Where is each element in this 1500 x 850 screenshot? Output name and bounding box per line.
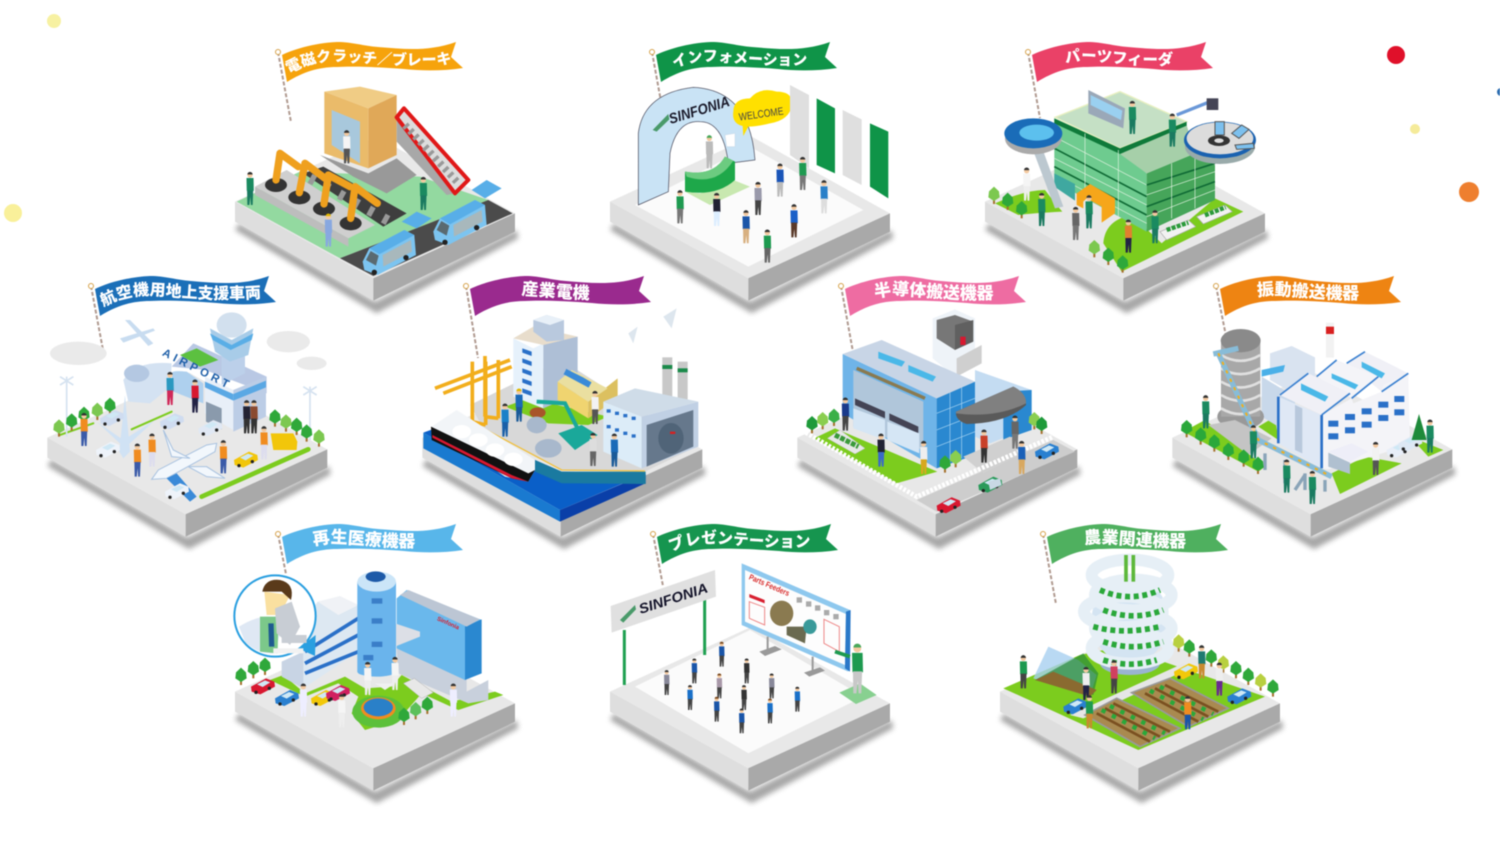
banner posts bbox=[624, 598, 705, 685]
road bbox=[917, 440, 1075, 512]
white floor bbox=[635, 147, 863, 267]
runway green strips bbox=[60, 412, 308, 497]
scene: airport bbox=[47, 312, 331, 549]
excavator bbox=[530, 402, 598, 450]
flag: semiconductor transfer equipment bbox=[837, 275, 1026, 350]
flag: aircraft ground support vehicles: 航空機用地上支援車両 bbox=[99, 280, 261, 308]
left feeder disc bbox=[1004, 118, 1063, 208]
scene: agriculture bbox=[1000, 555, 1283, 803]
main factory bbox=[1278, 352, 1410, 469]
spiral plant tower bbox=[1084, 555, 1172, 675]
decorative dot: pale yellow left bbox=[4, 204, 22, 222]
platform bbox=[47, 373, 331, 549]
round tower bbox=[357, 571, 396, 677]
vehicles bbox=[1063, 663, 1251, 714]
trees bbox=[53, 398, 325, 447]
scene: information reception bbox=[610, 85, 893, 313]
decorative dot: blue bbox=[1497, 88, 1500, 96]
scene: vibratory conveying factory bbox=[1172, 323, 1456, 549]
main airplane bbox=[152, 430, 225, 479]
scrap piles bbox=[527, 417, 562, 458]
ship bbox=[431, 410, 535, 482]
small annex bbox=[1328, 443, 1368, 474]
green floor bbox=[237, 172, 488, 258]
vans bbox=[1387, 435, 1422, 458]
flag: presentation: プレゼンテーション bbox=[668, 528, 810, 552]
welcome bubble: WELCOME bbox=[738, 105, 784, 124]
quay land bbox=[470, 360, 697, 472]
flag: agricultural equipment: 農業関連機器 bbox=[1084, 528, 1186, 550]
flag: regenerative medicine equipment: 再生医療機器 bbox=[312, 528, 416, 550]
sky plane bbox=[120, 320, 155, 346]
green paths and lawn bbox=[270, 675, 503, 730]
farm plots bbox=[1085, 678, 1228, 747]
screen feet bbox=[759, 637, 825, 677]
raised conveyor stand bbox=[255, 167, 407, 247]
welcome bubble bbox=[733, 90, 792, 136]
flag: parts feeder bbox=[1024, 41, 1214, 119]
flag: parts feeder: パーツフィーダ bbox=[1065, 47, 1174, 67]
quay face bbox=[535, 460, 646, 484]
conveyor line bbox=[1213, 348, 1332, 492]
workers bbox=[501, 389, 618, 467]
platform bbox=[610, 627, 893, 803]
canopy bbox=[956, 387, 1026, 424]
decorative dot: pale yellow top left bbox=[47, 14, 61, 28]
scene: parts feeder building bbox=[985, 90, 1268, 313]
building bbox=[1054, 92, 1215, 232]
steps under elevator bbox=[320, 155, 417, 193]
flag: electromagnetic clutch / brake: 電磁クラッチ／ブレーキ bbox=[284, 48, 451, 73]
workers bbox=[246, 172, 427, 247]
greenhouse bbox=[1033, 647, 1098, 697]
right hospital wing: Sinfonia bbox=[436, 616, 460, 632]
lawn bbox=[1183, 417, 1443, 494]
quay yellow line bbox=[483, 428, 645, 471]
reception desk and receptionist bbox=[685, 133, 750, 205]
farm road bbox=[1070, 663, 1193, 718]
trees bbox=[235, 658, 433, 725]
yellow factory bbox=[558, 370, 618, 418]
flag: information: インフォメーション bbox=[672, 49, 808, 68]
fountain bbox=[352, 696, 404, 728]
vehicles bbox=[937, 443, 1059, 513]
wind poles bbox=[60, 377, 317, 440]
scene: presentation bbox=[610, 563, 893, 803]
trees bbox=[1173, 634, 1279, 697]
entrance steps bbox=[963, 437, 1030, 473]
flag: semiconductor transfer equipment: 半導体搬送機器 bbox=[874, 280, 994, 302]
workers bbox=[1202, 395, 1434, 504]
platform bbox=[235, 137, 518, 313]
spiral tower bbox=[1217, 329, 1264, 429]
flag: vibratory conveying equipment bbox=[1212, 275, 1402, 334]
decorative dot: pale yellow right bbox=[1410, 124, 1420, 134]
arch logo bbox=[653, 94, 732, 132]
buses bbox=[363, 180, 502, 275]
decorative dot: orange bbox=[1459, 182, 1479, 202]
trees bbox=[1181, 414, 1427, 474]
arch logo: SINFONIA bbox=[667, 94, 732, 128]
scene: industrial machinery at port bbox=[422, 308, 706, 549]
platform bbox=[985, 137, 1268, 313]
main building bbox=[843, 340, 975, 468]
decorative dot: red bbox=[1387, 46, 1405, 64]
right hospital wing bbox=[397, 590, 488, 703]
trees and planter bbox=[806, 409, 1047, 473]
audience bbox=[664, 642, 800, 733]
rear wing bbox=[975, 370, 1032, 443]
orange entrance bbox=[1077, 184, 1115, 223]
lawns bbox=[995, 190, 1243, 272]
flag: aircraft ground support vehicles bbox=[87, 275, 276, 348]
road bbox=[340, 200, 513, 276]
staff and passengers bbox=[80, 372, 268, 477]
rubble base bbox=[1208, 420, 1272, 455]
lawn bbox=[814, 428, 937, 483]
right feeder disc and robot arm bbox=[1177, 98, 1256, 164]
hanging banners bbox=[790, 85, 888, 198]
scene: semiconductor building bbox=[797, 309, 1081, 549]
planters bbox=[1160, 205, 1232, 240]
people bbox=[1023, 101, 1176, 253]
water bbox=[423, 428, 646, 522]
presenter on podium bbox=[835, 644, 877, 704]
terminal and control tower bbox=[123, 312, 267, 432]
flag: vibratory conveying equipment: 振動搬送機器 bbox=[1256, 280, 1360, 302]
crane bbox=[435, 356, 512, 425]
escalator bbox=[397, 108, 468, 195]
flag: regenerative medicine equipment bbox=[274, 523, 464, 574]
vertical plane bbox=[97, 395, 155, 458]
upper tower and box bbox=[933, 309, 982, 377]
airport sign: AIRPORT bbox=[160, 347, 234, 392]
flag: industrial electric machinery: 産業電機 bbox=[521, 280, 590, 302]
grass bbox=[505, 398, 608, 425]
ground vehicles bbox=[96, 410, 297, 502]
platform bbox=[422, 373, 706, 549]
scene: regenerative medicine hospital bbox=[234, 571, 518, 803]
flag: agricultural equipment bbox=[1039, 523, 1228, 604]
power station and turbine bbox=[603, 357, 698, 468]
white floor bbox=[635, 630, 863, 753]
platform bbox=[797, 373, 1081, 549]
office tower bbox=[513, 315, 578, 408]
seagulls bbox=[628, 308, 677, 343]
trees bbox=[988, 187, 1128, 273]
elevator tower bbox=[324, 87, 397, 168]
screen: Parts Feeders bbox=[748, 573, 791, 598]
flag: electromagnetic clutch / brake bbox=[274, 41, 464, 122]
scene: factory, elevator, escalator and buses bbox=[235, 87, 518, 313]
platform bbox=[1000, 627, 1283, 803]
robot arms bbox=[265, 153, 377, 230]
platform bbox=[235, 627, 518, 803]
SINFONIA banner bbox=[611, 570, 716, 633]
visitors bbox=[676, 157, 828, 263]
flag: information bbox=[648, 41, 838, 98]
farmers bbox=[1020, 645, 1223, 729]
cars bbox=[251, 678, 350, 706]
arch bbox=[638, 87, 755, 205]
bridge bbox=[395, 623, 420, 647]
platform bbox=[1172, 373, 1456, 549]
clouds bbox=[50, 331, 327, 370]
roof sign bbox=[1088, 90, 1125, 128]
microscope callout circle bbox=[234, 575, 316, 657]
flag: industrial electric machinery bbox=[462, 275, 652, 359]
lawn bbox=[1003, 647, 1265, 750]
people bbox=[842, 398, 1025, 474]
fence bbox=[798, 428, 1053, 497]
SINFONIA banner: SINFONIA bbox=[637, 579, 710, 617]
flag: presentation bbox=[649, 523, 838, 586]
screen bbox=[742, 563, 851, 672]
platform bbox=[610, 137, 893, 313]
doctors bbox=[300, 657, 457, 727]
back buildings and chimney bbox=[1262, 323, 1334, 437]
planter bbox=[403, 678, 433, 698]
left hospital wing bbox=[282, 596, 358, 688]
